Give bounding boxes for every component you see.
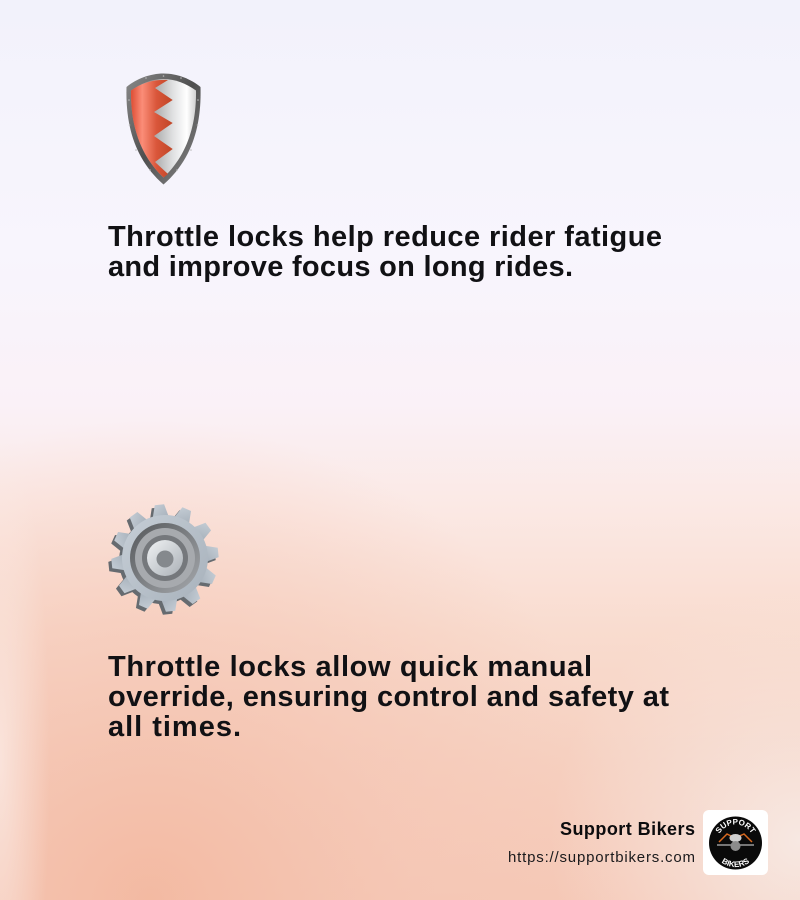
footer: url: https://supportbikers.com: [508, 849, 695, 866]
text: override statement: override, ensuring control and safety at: [108, 681, 669, 713]
text: fatigue statement: and improve focus on long rides.: [108, 251, 573, 283]
footer: brand name: Support Bikers: [560, 819, 695, 839]
logo: SUPPORT: [716, 819, 756, 833]
icon: shield: [126, 74, 201, 184]
text: override statement: all times.: [108, 711, 241, 743]
text: fatigue statement: Throttle locks help reduce rider fatigue: [108, 221, 662, 253]
text: override statement: Throttle locks allow quick manual: [108, 651, 592, 683]
icon: gear: [103, 499, 224, 620]
logo: BIKERS: [722, 858, 749, 868]
logo: [703, 810, 768, 875]
